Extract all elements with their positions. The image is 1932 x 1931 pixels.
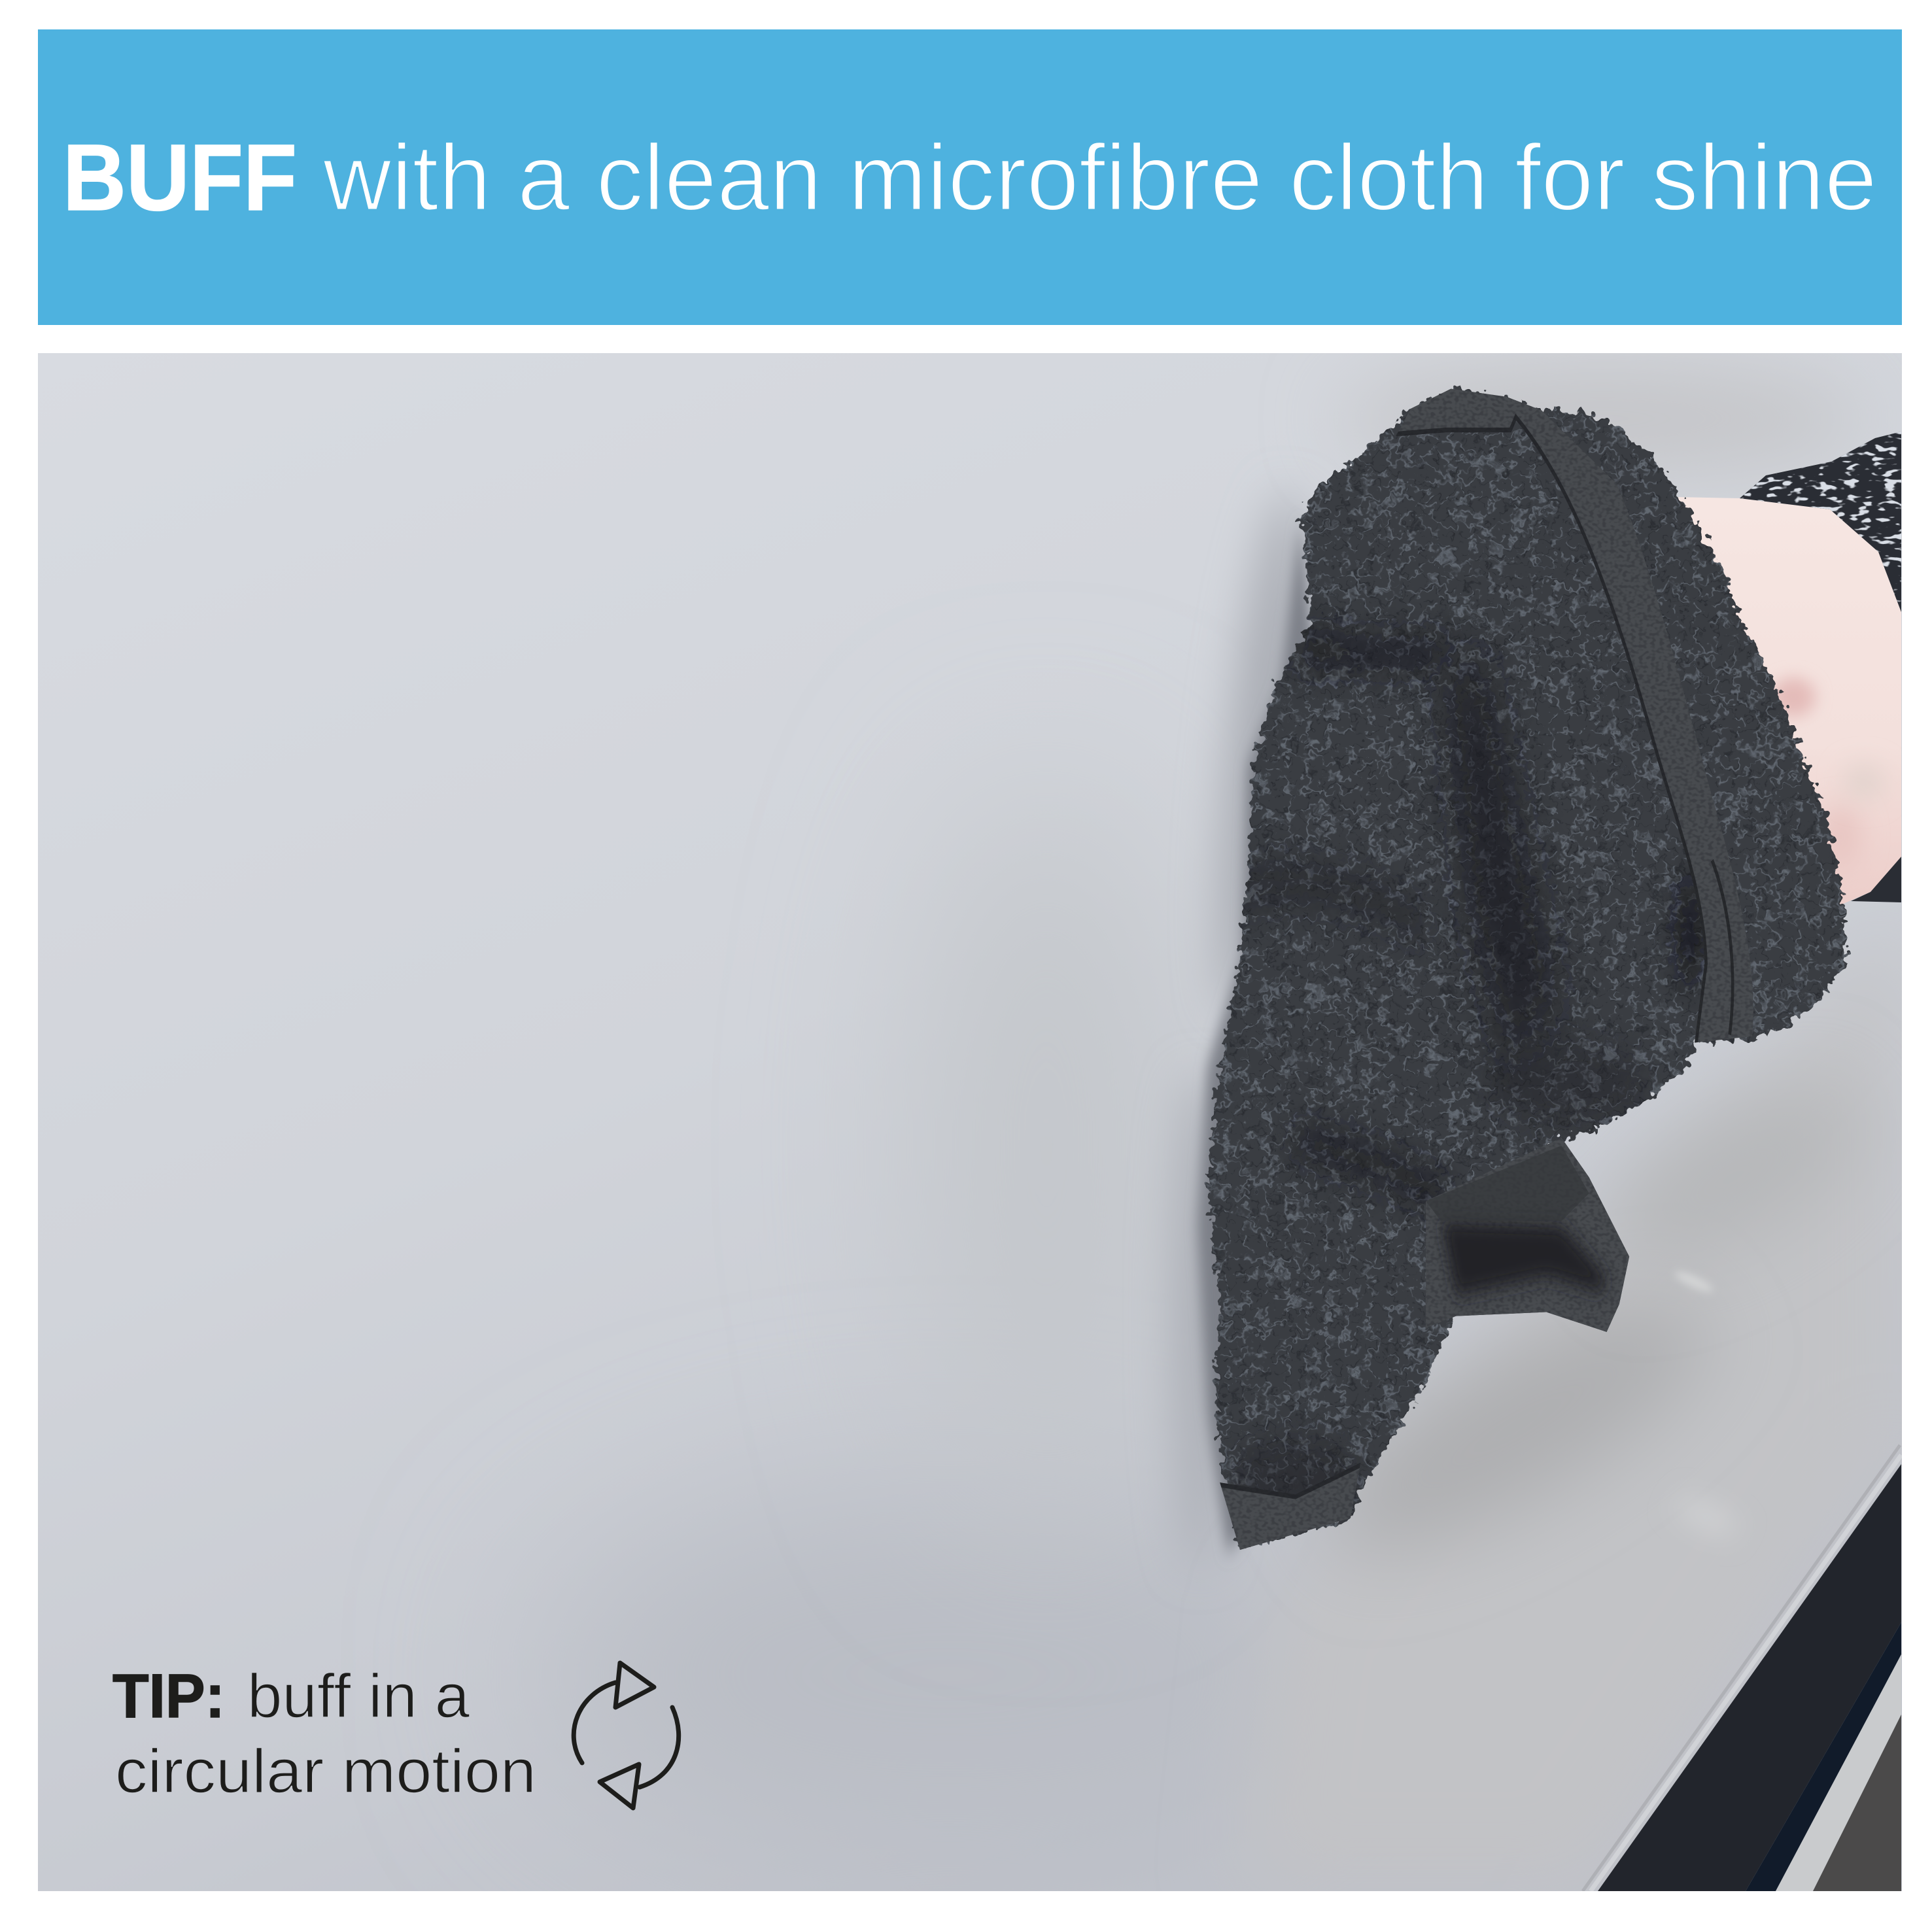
jumper sleeve: [1736, 425, 1903, 902]
icon: circular motion arrows: [574, 1663, 679, 1808]
flap interior shading: [1441, 1221, 1609, 1296]
title text: BUFF: [63, 125, 297, 230]
tip text: circular motion: [115, 1737, 536, 1806]
panel: photo of cloth buffing the car door: [38, 353, 1903, 1891]
tip text: TIP:: [112, 1662, 225, 1731]
cloth corner flap: [1426, 1138, 1629, 1332]
cloth hem bands: [1177, 366, 1902, 1596]
tip text: buff in a: [247, 1662, 470, 1731]
title banner: [38, 29, 1902, 325]
cloth base colour: [1177, 366, 1902, 1596]
folds and shadows in cloth: [1220, 623, 1704, 1518]
hem band edge shadows: [1220, 420, 1733, 1494]
title text: with a clean microfibre cloth for shine: [322, 125, 1877, 230]
cloth texture: [1177, 379, 1897, 1596]
grey terry microfibre cloth: [1177, 366, 1902, 1596]
car door trim and sill: [1583, 1445, 1901, 1891]
hand and wrist: [1674, 497, 1901, 909]
contact shadow beneath cloth: [1192, 527, 1313, 1556]
painted car door surface: [38, 353, 1902, 1891]
tip text: [112, 1662, 536, 1806]
